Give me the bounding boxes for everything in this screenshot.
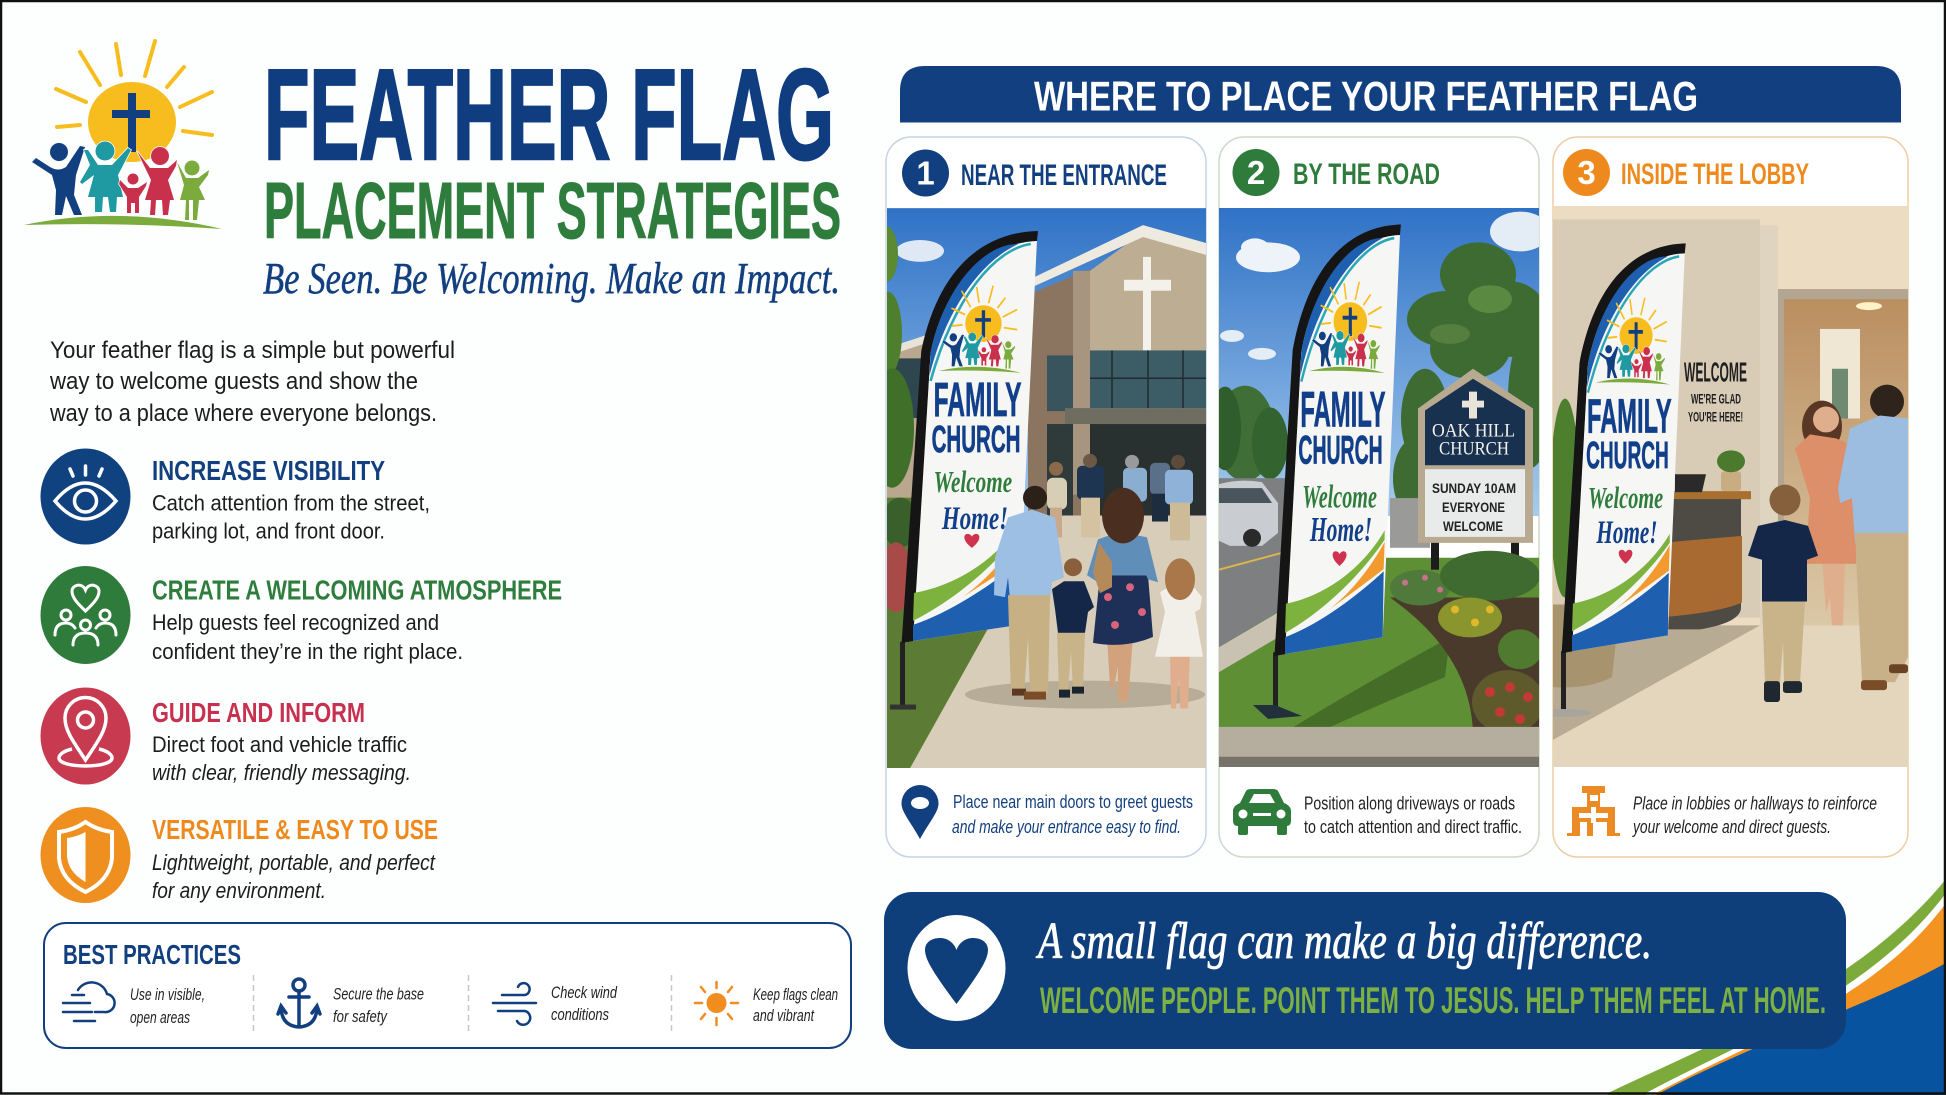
benefit: guide and inform: GUIDE AND INFORM: [152, 697, 365, 728]
family: [994, 486, 1203, 709]
number badge 3: [1563, 149, 1610, 196]
panel: best practices: [44, 923, 851, 1048]
benefit: versatile: for any environment.: [152, 878, 326, 903]
benefit: increase visibility: INCREASE VISIBILITY: [152, 455, 385, 486]
icon: eye: [40, 448, 130, 544]
icon: location pin: [40, 688, 130, 784]
benefit: guide and inform: Direct foot and vehicle traffic: [152, 732, 407, 757]
church sign: SUNDAY 10AM: [1432, 480, 1516, 496]
benefit: versatile: [40, 807, 438, 903]
feather flag: Welcome: [1588, 481, 1663, 515]
intro text: [49, 337, 455, 427]
photo: lobby interior with flag: WELCOME: [1684, 357, 1747, 388]
people: [1748, 385, 1908, 702]
photo: family walking to church entrance with flag: [870, 208, 1206, 768]
title: PLACEMENT STRATEGIES: [264, 166, 841, 255]
panel: near the entrance: Place near main doors to greet guests: [953, 792, 1193, 812]
benefit: welcoming atmosphere: Help guests feel recognized and: [152, 610, 439, 635]
benefit: guide and inform: [40, 688, 411, 785]
panel: best practices: BEST PRACTICES: [63, 939, 241, 970]
benefit: versatile: VERSATILE & EASY TO USE: [152, 814, 438, 845]
benefit: welcoming atmosphere: [40, 566, 562, 664]
intro text: way to a place where everyone belongs.: [49, 400, 437, 427]
panel: by the road: Position along driveways or roads: [1304, 794, 1515, 814]
title: [263, 43, 841, 303]
panel: best practices: open areas: [130, 1008, 190, 1027]
logo: church family: [24, 41, 222, 229]
benefit: guide and inform: with clear, friendly messaging.: [152, 760, 411, 785]
panel: inside the lobby: [1535, 137, 1908, 857]
church sign: WELCOME: [1443, 518, 1503, 534]
feather flag: [1274, 224, 1401, 656]
icon: heart in circle: [908, 915, 1006, 1021]
reception desk: [1668, 450, 1751, 630]
church sign: OAK HILL: [1432, 420, 1515, 441]
number badge 2: 2: [1247, 154, 1265, 191]
title: Be Seen. Be Welcoming. Make an Impact.: [263, 254, 840, 303]
feather flag: CHURCH: [1298, 428, 1383, 473]
photo: lobby interior with flag: WE'RE GLAD: [1691, 391, 1741, 407]
panel: best practices: Keep flags clean: [753, 985, 838, 1004]
number badge 2: [1232, 149, 1280, 196]
benefit: welcoming atmosphere: CREATE A WELCOMING ATMOSPHERE: [152, 574, 562, 606]
photo: flag by the road with church sign: [1209, 208, 1552, 769]
panel: inside the lobby: Place in lobbies or hallways to reinforce: [1633, 794, 1877, 814]
icon: wind: [493, 983, 536, 1025]
feather flag: Welcome: [934, 464, 1012, 499]
corner swoosh: [1608, 879, 1946, 1095]
icon: shield: [40, 807, 130, 903]
benefit: increase visibility: [40, 448, 430, 544]
header bar: WHERE TO PLACE YOUR FEATHER FLAG: [1034, 72, 1698, 120]
panel: best practices: conditions: [551, 1005, 609, 1024]
feather flag: Home!: [1309, 511, 1372, 549]
feather flag: Welcome: [1302, 478, 1377, 515]
feather flag: Home!: [1596, 514, 1658, 550]
background people: [1047, 454, 1193, 540]
panel: by the road: to catch attention and direct traffic.: [1304, 817, 1522, 837]
feather flag: CHURCH: [1586, 434, 1669, 476]
panel: by the road: BY THE ROAD: [1293, 158, 1440, 191]
banner: call to action: [884, 892, 1846, 1049]
icon: car: [1233, 789, 1291, 835]
number badge 1: 1: [916, 154, 935, 192]
panel: inside the lobby: your welcome and direct guests.: [1631, 817, 1831, 837]
icon: building: [1567, 786, 1620, 836]
benefit: versatile: Lightweight, portable, and perfect: [152, 850, 436, 875]
icon: heart and people: [40, 566, 130, 664]
feather flag: FAMILY: [1300, 382, 1386, 438]
title: FEATHER FLAG: [264, 43, 834, 187]
icon: map pin: [902, 785, 938, 839]
intro text: Your feather flag is a simple but powerful: [50, 337, 455, 364]
photo: lobby interior with flag: YOU'RE HERE!: [1688, 409, 1743, 424]
panel: near the entrance: [870, 137, 1206, 857]
banner: call to action: A small flag can make a big difference.: [1036, 913, 1652, 970]
panel: best practices: and vibrant: [753, 1006, 815, 1025]
feather flag: [902, 231, 1038, 643]
icon: anchor: [278, 979, 320, 1027]
number badge 1: [902, 150, 949, 196]
benefit: increase visibility: Catch attention from the street,: [152, 490, 430, 516]
panel: best practices: for safety: [333, 1007, 388, 1026]
feather flag: Home!: [941, 500, 1008, 537]
panel: by the road: [1209, 137, 1552, 857]
feather flag: FAMILY: [934, 374, 1021, 427]
panel: best practices: Secure the base: [333, 984, 424, 1004]
icon: sun: [695, 982, 738, 1025]
panel: best practices: Check wind: [551, 983, 617, 1002]
feather flag: CHURCH: [932, 419, 1020, 461]
panel: best practices: Use in visible,: [130, 985, 205, 1004]
intro text: way to welcome guests and show the: [49, 368, 418, 395]
feather flag: [1562, 243, 1686, 653]
number badge 3: 3: [1577, 154, 1596, 191]
panel: near the entrance: and make your entrance easy to find.: [952, 817, 1181, 837]
benefit: increase visibility: parking lot, and front door.: [152, 518, 385, 544]
photo: lobby interior with flag: [1535, 206, 1908, 769]
church sign: EVERYONE: [1442, 499, 1505, 515]
benefit: welcoming atmosphere: confident they’re in the right place.: [152, 639, 463, 664]
church sign: CHURCH: [1439, 438, 1509, 459]
church sign: [1418, 369, 1533, 543]
panel: inside the lobby: INSIDE THE LOBBY: [1621, 158, 1809, 191]
icon: cloud and wind: [63, 982, 115, 1021]
panel: near the entrance: NEAR THE ENTRANCE: [961, 159, 1167, 192]
feather flag: FAMILY: [1587, 389, 1672, 443]
